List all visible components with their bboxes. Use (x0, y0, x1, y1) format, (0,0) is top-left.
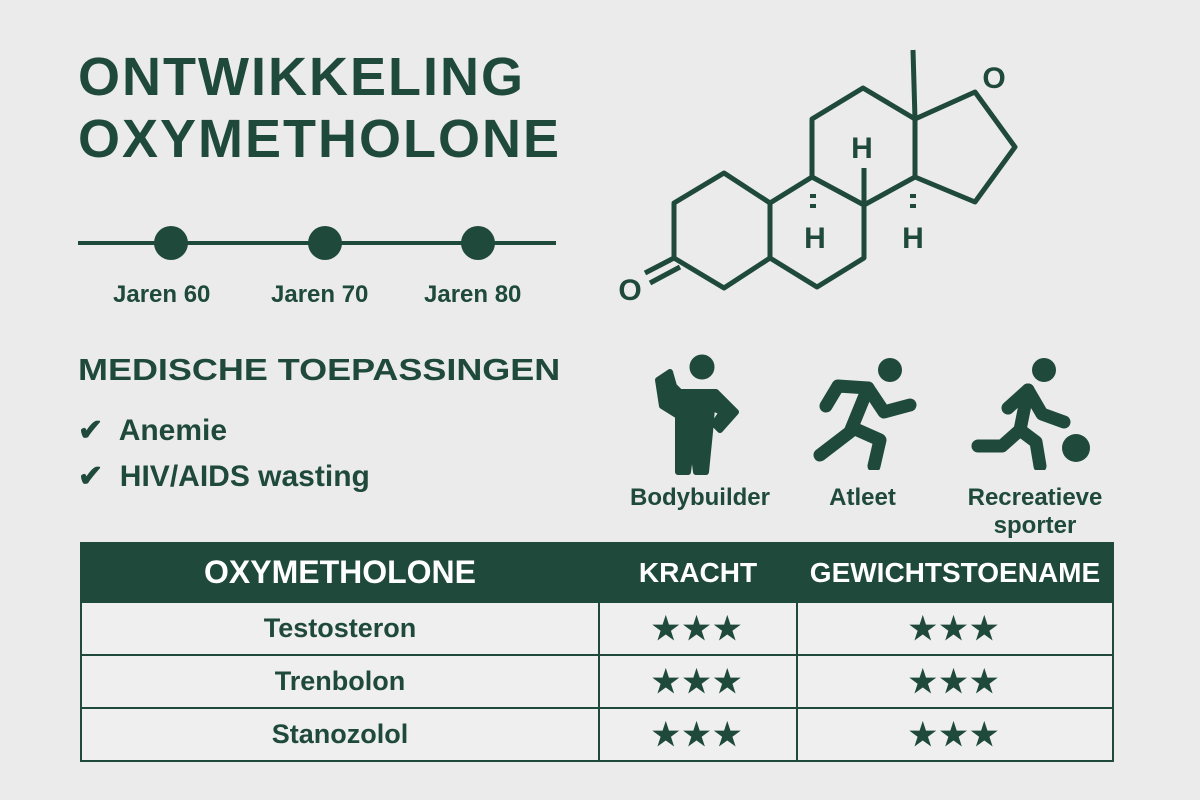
timeline: Jaren 60 (113, 281, 210, 308)
title: ONTWIKKELING (78, 47, 525, 107)
title: OXYMETHOLONE (78, 109, 561, 169)
timeline: Jaren 70 (271, 281, 368, 308)
timeline: Jaren 80 (424, 281, 521, 308)
molecule: O (982, 62, 1006, 95)
list (78, 414, 370, 493)
comparison table: ★★★ (909, 610, 1001, 646)
comparison table: GEWICHTSTOENAME (810, 556, 1100, 588)
list: ✔ Anemie (78, 414, 227, 447)
comparison table (80, 542, 1114, 762)
title (78, 47, 561, 169)
comparison table: ★★★ (652, 664, 744, 698)
molecule: H (902, 222, 924, 255)
heading: medische toepassingen: MEDISCHE TOEPASSINGEN (78, 352, 560, 387)
comparison table: OXYMETHOLONE (204, 554, 476, 590)
comparison table: ★★★ (909, 716, 1001, 752)
list: ✔ HIV/AIDS wasting (78, 460, 370, 493)
comparison table: KRACHT (639, 556, 757, 588)
comparison table: Stanozolol (272, 719, 408, 749)
molecule: H (851, 132, 873, 165)
text: sporter (994, 512, 1076, 539)
comparison table: ★★★ (652, 716, 744, 752)
comparison table: ★★★ (652, 610, 744, 646)
comparison table: ★★★ (909, 664, 1001, 698)
molecule: H (804, 222, 826, 255)
icon: recreatieve sporter (972, 358, 1090, 470)
icon: atleet (814, 358, 916, 470)
icon: bodybuilder (655, 354, 739, 475)
timeline (78, 226, 556, 308)
text: Bodybuilder (630, 484, 770, 511)
molecule: O (618, 274, 642, 307)
comparison table: Trenbolon (275, 666, 405, 696)
comparison table: Testosteron (264, 613, 416, 643)
text: Atleet (829, 484, 896, 511)
text: Recreatieve (968, 484, 1102, 511)
molecule (618, 50, 1018, 307)
labels: user types (630, 484, 1102, 539)
